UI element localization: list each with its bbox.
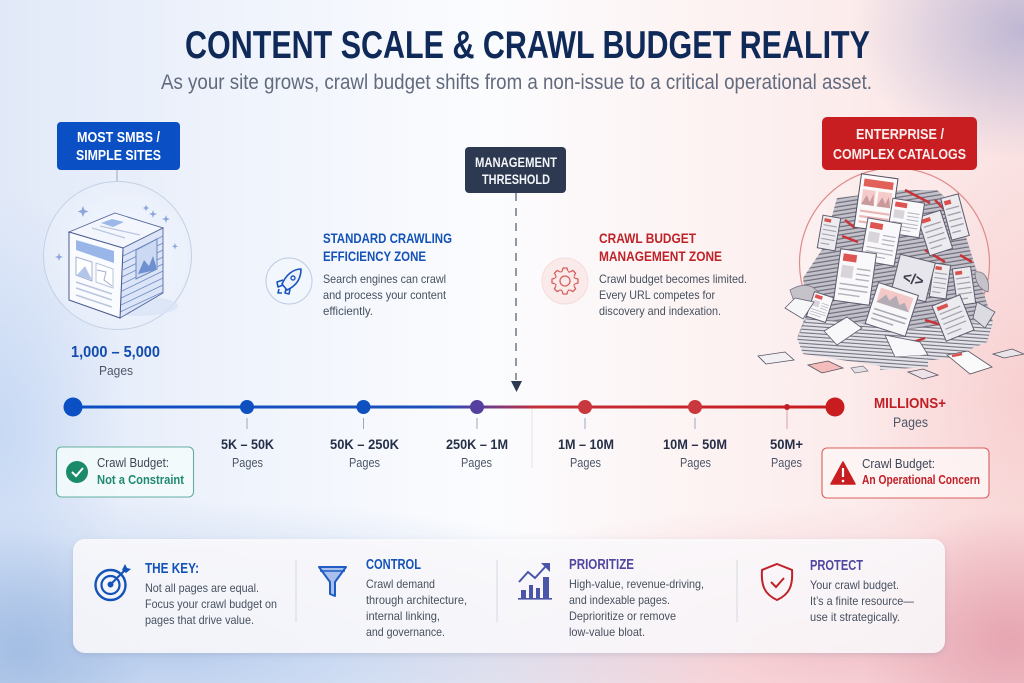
badge: most SMBs: MOST SMBS / (77, 130, 160, 146)
illustration: huge pile of pages (758, 168, 1024, 379)
icon: gear (542, 258, 588, 304)
takeaway: prioritize: High-value, revenue-driving, (569, 577, 704, 591)
zone: standard crawling: efficiently. (323, 304, 373, 318)
scale label: millions: MILLIONS+ (874, 395, 946, 412)
icon: growth chart (518, 563, 552, 600)
icon: rocket (266, 258, 312, 304)
zone: standard crawling: Search engines can crawl (323, 272, 446, 286)
status: not a constraint: Crawl Budget: (97, 456, 169, 470)
takeaway: protect: Your crawl budget. (810, 578, 899, 592)
panel: key takeaways (73, 539, 945, 653)
zone: standard crawling: EFFICIENCY ZONE (323, 248, 426, 264)
takeaway: prioritize: PRIORITIZE (569, 557, 634, 573)
scale label: 1M-10M: Pages (570, 456, 601, 470)
scale label: 250K-1M: Pages (461, 456, 492, 470)
code card (891, 254, 935, 302)
zone: crawl budget management: MANAGEMENT ZONE (599, 248, 722, 264)
small range label: Pages (99, 363, 133, 378)
takeaway: the key: pages that drive value. (145, 613, 254, 627)
zone: crawl budget management: discovery and indexation. (599, 304, 721, 318)
zone: standard crawling (266, 230, 452, 318)
takeaway: protect: It’s a finite resource— (810, 594, 914, 608)
takeaway: control: internal linking, (366, 609, 440, 623)
small range label (71, 344, 160, 378)
scale label: 10M-50M: 10M – 50M (663, 436, 727, 452)
scale label: 5K-50K: 5K – 50K (221, 436, 274, 452)
zone: standard crawling: and process your content (323, 288, 447, 302)
scale label: 50K-250K: Pages (349, 456, 380, 470)
icon: check (66, 461, 88, 483)
zone: crawl budget management (542, 230, 747, 318)
takeaway: the key: Focus your crawl budget on (145, 597, 277, 611)
status: operational concern: An Operational Concern (862, 473, 980, 487)
takeaway: control: through architecture, (366, 593, 467, 607)
status: operational concern (822, 448, 989, 498)
takeaway: prioritize: Deprioritize or remove (569, 609, 676, 623)
scale label: 5K-50K (221, 436, 274, 470)
takeaway: prioritize: low-value bloat. (569, 625, 645, 639)
scale label: 50M+: 50M+ (770, 436, 803, 452)
icon: target (96, 564, 131, 600)
scale label: 50K-250K: 50K – 250K (330, 436, 399, 452)
threshold marker: THRESHOLD (482, 172, 550, 187)
badge: most SMBs (57, 122, 180, 181)
icon: shield (762, 564, 792, 600)
takeaway: control (319, 557, 467, 639)
scale label: 50M+: Pages (771, 456, 802, 470)
takeaway: control: CONTROL (366, 557, 421, 573)
icon: warning (831, 462, 855, 484)
scale label: millions (874, 395, 946, 430)
icon: funnel (319, 567, 346, 596)
takeaway: protect: PROTECT (810, 558, 863, 574)
status: operational concern: Crawl Budget: (862, 457, 935, 471)
scale label: 1M-10M (558, 436, 614, 470)
scale label: 250K-1M (446, 436, 508, 470)
scale label: 50M+ (770, 436, 803, 470)
takeaway: prioritize: and indexable pages. (569, 593, 670, 607)
zone: crawl budget management: Every URL competes for (599, 288, 715, 302)
takeaway: the key (96, 561, 277, 627)
badge: enterprise (822, 117, 977, 170)
takeaway: the key: THE KEY: (145, 561, 199, 577)
takeaway: control: and governance. (366, 625, 445, 639)
small range label: 1,000 – 5,000 (71, 344, 160, 361)
takeaway: prioritize (518, 557, 704, 639)
timeline (64, 398, 844, 468)
takeaway: protect (762, 558, 914, 624)
scale label: 10M-50M (663, 436, 727, 470)
scale label: 1M-10M: 1M – 10M (558, 436, 614, 452)
badge: enterprise: ENTERPRISE / (856, 127, 944, 143)
takeaway: control: Crawl demand (366, 577, 435, 591)
zone: standard crawling: STANDARD CRAWLING (323, 230, 452, 246)
badge: enterprise: COMPLEX CATALOGS (833, 147, 966, 163)
badge: most SMBs: SIMPLE SITES (76, 148, 161, 164)
scale label: 5K-50K: Pages (232, 456, 263, 470)
code card: </> (901, 269, 926, 290)
zone: crawl budget management: Crawl budget becomes limited. (599, 272, 747, 286)
scale label: 10M-50M: Pages (680, 456, 711, 470)
chart page (865, 283, 918, 336)
status: not a constraint (56, 447, 194, 497)
scale label: 250K-1M: 250K – 1M (446, 436, 508, 452)
illustration: small stack of pages (44, 182, 192, 330)
subtitle: As your site grows, crawl budget shifts from a non-issue to a critical operational asset. (161, 71, 872, 94)
takeaway: protect: use it strategically. (810, 610, 900, 624)
scale label: millions: Pages (893, 415, 928, 430)
threshold marker: MANAGEMENT (475, 155, 558, 170)
scale label: 50K-250K (330, 436, 399, 470)
takeaway: the key: Not all pages are equal. (145, 581, 259, 595)
threshold marker (465, 147, 566, 392)
status: not a constraint: Not a Constraint (97, 473, 185, 487)
zone: crawl budget management: CRAWL BUDGET (599, 230, 696, 246)
